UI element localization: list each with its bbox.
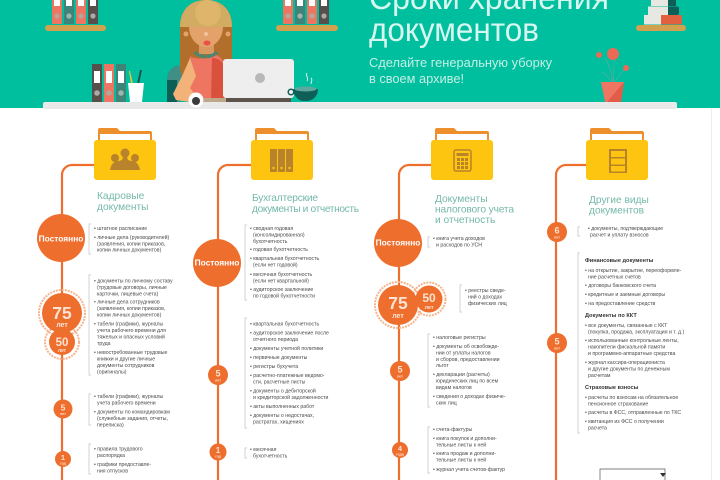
list 2: • табели (графики), журналы — [94, 322, 164, 328]
folder icon — [586, 128, 648, 180]
heading — [97, 191, 148, 213]
badge: 5 years: лет — [215, 378, 221, 382]
list 3: видам налогов — [436, 385, 472, 391]
list 3: нии от уплаты налогов — [436, 350, 491, 356]
list 2: и программно-аппаратные средства — [588, 351, 675, 357]
folder icon — [431, 128, 493, 180]
list 1: • штатное расписание — [94, 226, 147, 232]
badge: 1 year: 1 — [61, 453, 65, 462]
list 2: пенсионное страхование — [588, 402, 648, 408]
heading: Другие виды — [589, 195, 649, 206]
title — [369, 0, 609, 48]
list 2: сти, расчетные листы — [253, 380, 306, 386]
list 2: • все документы, связанные с ККТ — [585, 323, 668, 329]
badge: 75 and 50 years: 50 — [56, 337, 68, 349]
badge: permanently — [37, 214, 85, 262]
list 2: Финансовые документы — [585, 258, 654, 264]
list 1: • книга учета доходов — [433, 236, 485, 242]
badge: 5 years: 5 — [554, 336, 560, 346]
badge: 5 years: 5 — [215, 368, 221, 378]
badge: 5 years: 5 — [61, 402, 66, 412]
woman at laptop — [167, 0, 232, 108]
list 4: • счета-фактуры — [433, 427, 472, 433]
list 3: и сборов, предоставлении — [436, 357, 500, 363]
heading: документов — [589, 206, 644, 216]
badge: 4 years: года — [396, 452, 404, 456]
list 3: • табели (графики), журналы — [94, 394, 164, 400]
subtitle: Сделайте генеральную уборку — [369, 55, 552, 70]
list 1 — [428, 236, 485, 248]
list 3: бухотчетность — [253, 454, 288, 460]
list 2: карточки, лицевые счета) — [97, 292, 159, 298]
badge: 5 years — [208, 365, 228, 385]
badge: 75 and 50 years: 50 — [422, 291, 436, 305]
footnote box — [600, 469, 666, 480]
list 2: • невостребованные трудовые — [94, 350, 168, 356]
list 3: • месячная — [250, 447, 277, 453]
timeline — [556, 165, 586, 480]
heading: документы и отчетность — [252, 204, 359, 215]
list 1: • аудиторское заключение — [250, 287, 313, 293]
list 1: • годовая бухотчетность — [250, 247, 308, 253]
list 2: (трудовые договоры, личные — [97, 285, 167, 291]
heading: документы — [97, 202, 148, 213]
badge: 6 years: 6 — [554, 226, 560, 236]
title: документов — [369, 11, 539, 48]
list 2: копии личных документов) — [97, 312, 162, 318]
list 3: учета рабочего времени — [97, 400, 156, 406]
badge: 5 years — [390, 361, 410, 381]
badge: 5 years — [547, 333, 567, 353]
badge: permanently: Постоянно — [376, 238, 420, 248]
list 2: и кредиторской задолженности — [253, 394, 328, 401]
list 3 — [245, 447, 288, 460]
timeline — [62, 165, 94, 480]
folder icon — [94, 128, 156, 180]
desk binders and pencil cup — [92, 64, 144, 102]
list 4: • книга продаж и дополни- — [433, 451, 496, 457]
list 3: • налоговые регистры — [433, 335, 486, 341]
column: tax documents — [374, 128, 514, 480]
list 1: • квартальная бухотчетность — [250, 256, 319, 262]
badge: 75 and 50 years: 75 — [52, 303, 72, 323]
list 3: • сведения о доходах физиче- — [433, 394, 506, 400]
list 3 — [89, 394, 170, 428]
stack of books — [636, 0, 686, 31]
badge: 5 years: лет — [60, 412, 66, 416]
list 2 — [245, 318, 329, 428]
badge: 75 and 50 years: 75 — [388, 293, 408, 313]
list 2: • расчеты по взносам на обязательное — [585, 395, 678, 401]
list 1: (консолидированная) — [253, 232, 305, 238]
list 4: тельные листы к ней — [436, 442, 486, 448]
list 2: ний о доходах — [468, 294, 502, 300]
list 2: • договоры банковского счета — [585, 283, 656, 289]
list 2: • документы о дебиторской — [250, 388, 316, 394]
list 2: учета рабочего времени для — [97, 328, 166, 334]
list 2: (заявления, копии приказов, — [97, 306, 165, 312]
list 2: • квитанция из ФСС о получении — [585, 419, 664, 425]
list 2: • документы о недостачах, — [250, 413, 314, 419]
timeline — [218, 165, 251, 480]
list 2: • на предоставление средств — [585, 301, 656, 307]
list 2 — [578, 253, 684, 433]
heading — [589, 195, 649, 216]
list 2: (покупка, продажа, эксплуатация и т. д.) — [588, 330, 684, 336]
badge: 5 years: лет — [554, 346, 560, 350]
list 2: • документы по личному составу — [94, 278, 173, 284]
list 1 — [89, 224, 169, 254]
list 2: • квартальная бухотчетность — [250, 322, 319, 328]
list 1 — [578, 226, 663, 238]
list 2: накопители фискальной памяти — [588, 344, 665, 350]
list 2: ние расчетных счетов — [588, 274, 641, 280]
list 1: копии личных документов) — [97, 248, 162, 254]
list 4: • журнал учета счетов-фактур — [433, 467, 505, 473]
list 1: (если нет квартальной) — [253, 278, 309, 284]
column: other documents — [547, 128, 684, 480]
list 2 — [89, 275, 173, 376]
list 2 — [460, 285, 507, 312]
badge: 75 and 50 years: лет — [56, 322, 68, 329]
tea cup — [288, 73, 318, 101]
list 2: • реестры сведе- — [465, 288, 506, 294]
list 2: (оригиналы) — [97, 370, 127, 376]
list 4: • графики предоставле- — [94, 462, 151, 468]
list 1: бухотчетность — [253, 239, 288, 245]
header band — [0, 0, 720, 109]
list 3: льгот — [436, 363, 449, 369]
heading: Документы — [435, 194, 488, 205]
list 3: переписка) — [97, 422, 124, 428]
right shelf with binders — [276, 0, 338, 31]
list 2: • первичные документы — [250, 355, 308, 361]
list 2: тяжелых и опасных условий — [97, 334, 165, 340]
badge: 1 year: 1 — [216, 446, 221, 455]
heading — [435, 194, 514, 226]
list 4: • книга покупок и дополни- — [433, 436, 497, 442]
badge: permanently — [193, 239, 241, 287]
list 2: труда — [97, 341, 111, 347]
potted plant — [596, 48, 629, 102]
list 2: • журнал кассира-операциониста — [585, 360, 665, 366]
column: accounting documents — [193, 128, 359, 480]
subtitle: в своем архиве! — [369, 71, 464, 86]
list 4: тельные листы к ней — [436, 456, 486, 464]
list 2: • личные дела сотрудников — [94, 300, 160, 306]
heading — [252, 193, 359, 215]
badge: 4 years — [392, 442, 408, 458]
list 2: • на открытие, закрытие, переоформле- — [585, 268, 682, 274]
list 3: • документы по командировкам — [94, 410, 170, 416]
badge: 5 years: лет — [397, 374, 403, 378]
badge: 1 year — [210, 444, 226, 460]
heading: и отчетность — [435, 215, 495, 226]
list 2: Документы по ККТ — [585, 313, 637, 319]
badge: 6 years — [547, 222, 567, 242]
badge: 1 year — [55, 451, 71, 467]
list 2: • регистры бухучета — [250, 364, 298, 370]
list 2: и другие документы по денежным — [588, 366, 670, 372]
list 2: • использованные контрольные ленты, — [585, 338, 679, 344]
list 1: по годовой бухотчетности — [253, 292, 315, 300]
badge: permanently: Постоянно — [39, 234, 83, 244]
badge: 5 years — [54, 400, 72, 418]
list 1: • документы, подтверждающие — [588, 226, 663, 232]
list 2: • аудиторское заключение после — [250, 330, 329, 336]
badge: 75 and 50 years — [39, 290, 85, 359]
list 1: • сводная годовая — [250, 226, 293, 232]
heading: Бухгалтерские — [252, 193, 318, 204]
badge: 4 years: 4 — [398, 444, 403, 453]
list 2: отчетного периода — [253, 337, 298, 343]
badge: 6 years: лет — [554, 236, 560, 240]
list 3: • декларации (расчеты) — [433, 372, 490, 378]
list 2: книжки и другие личные — [97, 356, 155, 362]
list 2: Страховые взносы — [585, 385, 639, 391]
list 3: ских лиц — [436, 400, 457, 406]
badge: 5 years: 5 — [397, 364, 403, 374]
list 1: • личные дела (руководителей) — [94, 234, 169, 241]
list 2: расчетам — [588, 373, 611, 379]
list 2: • расчеты в ФСС, отправленные по ТКС — [585, 410, 681, 416]
list 3: • документы об освобожде- — [433, 344, 499, 350]
list 4: • правила трудового — [94, 446, 143, 452]
laptop — [223, 59, 294, 102]
list 2: • расчетно-платежные ведомо- — [250, 373, 325, 379]
list 1 — [245, 225, 319, 300]
list 4 — [428, 427, 505, 473]
list 4: распорядка — [97, 453, 125, 459]
badge: 1 year: год — [60, 462, 67, 466]
list 2: документы сотрудников — [97, 363, 155, 369]
list 4 — [89, 444, 151, 474]
list 1: (заявления, копии приказов, — [97, 242, 165, 248]
folder icon — [251, 128, 313, 180]
list 1: • месячная бухотчетность — [250, 272, 312, 278]
badge: 75 and 50 years: лет — [58, 348, 67, 354]
badge: permanently — [374, 219, 422, 267]
heading: Кадровые — [97, 191, 145, 202]
list 2: • акты выполненных работ — [250, 404, 315, 410]
heading: налогового учета — [435, 204, 514, 216]
list 2: физических лиц — [468, 301, 507, 307]
badge: permanently: Постоянно — [195, 258, 239, 268]
desk — [43, 102, 677, 109]
badge: 75 and 50 years — [375, 282, 446, 328]
list 2: расчета — [588, 426, 607, 432]
column: personnel documents — [37, 128, 173, 480]
left shelf with binders — [45, 0, 106, 31]
list 1: расчет и уплату взносов — [590, 232, 649, 238]
list 3: (служебные задания, отчеты, — [97, 416, 168, 422]
badge: 75 and 50 years: лет — [424, 305, 434, 311]
list 2: растратах, хищениях — [253, 420, 304, 426]
list 1: (если нет годовой) — [253, 262, 298, 268]
list 4: ния отпусков — [97, 468, 128, 474]
timeline — [399, 165, 431, 480]
list 2: • документы учетной политики — [250, 345, 323, 352]
list 3: юридических лиц по всем — [436, 378, 499, 384]
subtitle — [369, 55, 552, 86]
badge: 1 year: год — [215, 454, 222, 458]
badge: 75 and 50 years: лет — [392, 313, 404, 320]
list 3 — [428, 334, 506, 407]
list 1: и расходов по УСН — [436, 242, 482, 248]
list 2: • кредитные и заемные договоры — [585, 292, 665, 298]
